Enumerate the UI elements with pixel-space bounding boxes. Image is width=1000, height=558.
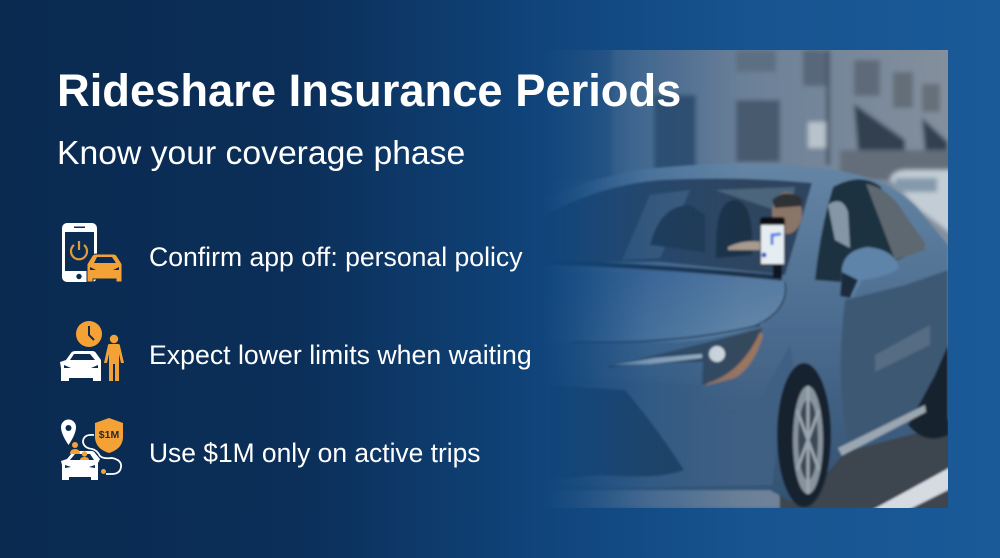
rear wheel [908,345,948,438]
phone on dash mount [760,217,785,278]
text: use $1M on active trips: Use $1M only on active trips [149,438,480,468]
row 1: confirm app off [62,223,522,282]
background white car [888,166,948,234]
road [780,420,960,510]
side sill [838,405,926,456]
hood [604,275,785,342]
front wheel [777,363,831,507]
subtitle: Know your coverage phase [57,134,465,172]
icon: phone with power symbol and car [62,223,122,282]
row 2: expect lower limits [60,321,532,381]
grille [582,388,684,477]
icon: car, clock and waiting person [60,321,124,381]
headlight [608,328,762,385]
side mirror [840,247,899,298]
text: confirm app off: Confirm app off: personal policy [149,242,522,272]
driver and seats [772,192,802,234]
hood crease and windshield base [530,262,782,278]
row 3: use $1M on active trips [61,418,480,480]
icon: pin, shield, route and car with riders: $1M [99,429,119,441]
icon: pin, shield, route and car with riders [61,418,123,480]
text: expect lower limits: Expect lower limits when waiting [149,340,532,370]
car body [530,164,948,507]
title: Rideshare Insurance Periods [57,65,681,116]
photo: blue sedan with driver on city street [560,50,948,508]
windshield [530,179,812,275]
street background [562,50,948,508]
front bumper [632,349,790,486]
side window and pillar [815,179,915,282]
door panels [841,270,948,445]
